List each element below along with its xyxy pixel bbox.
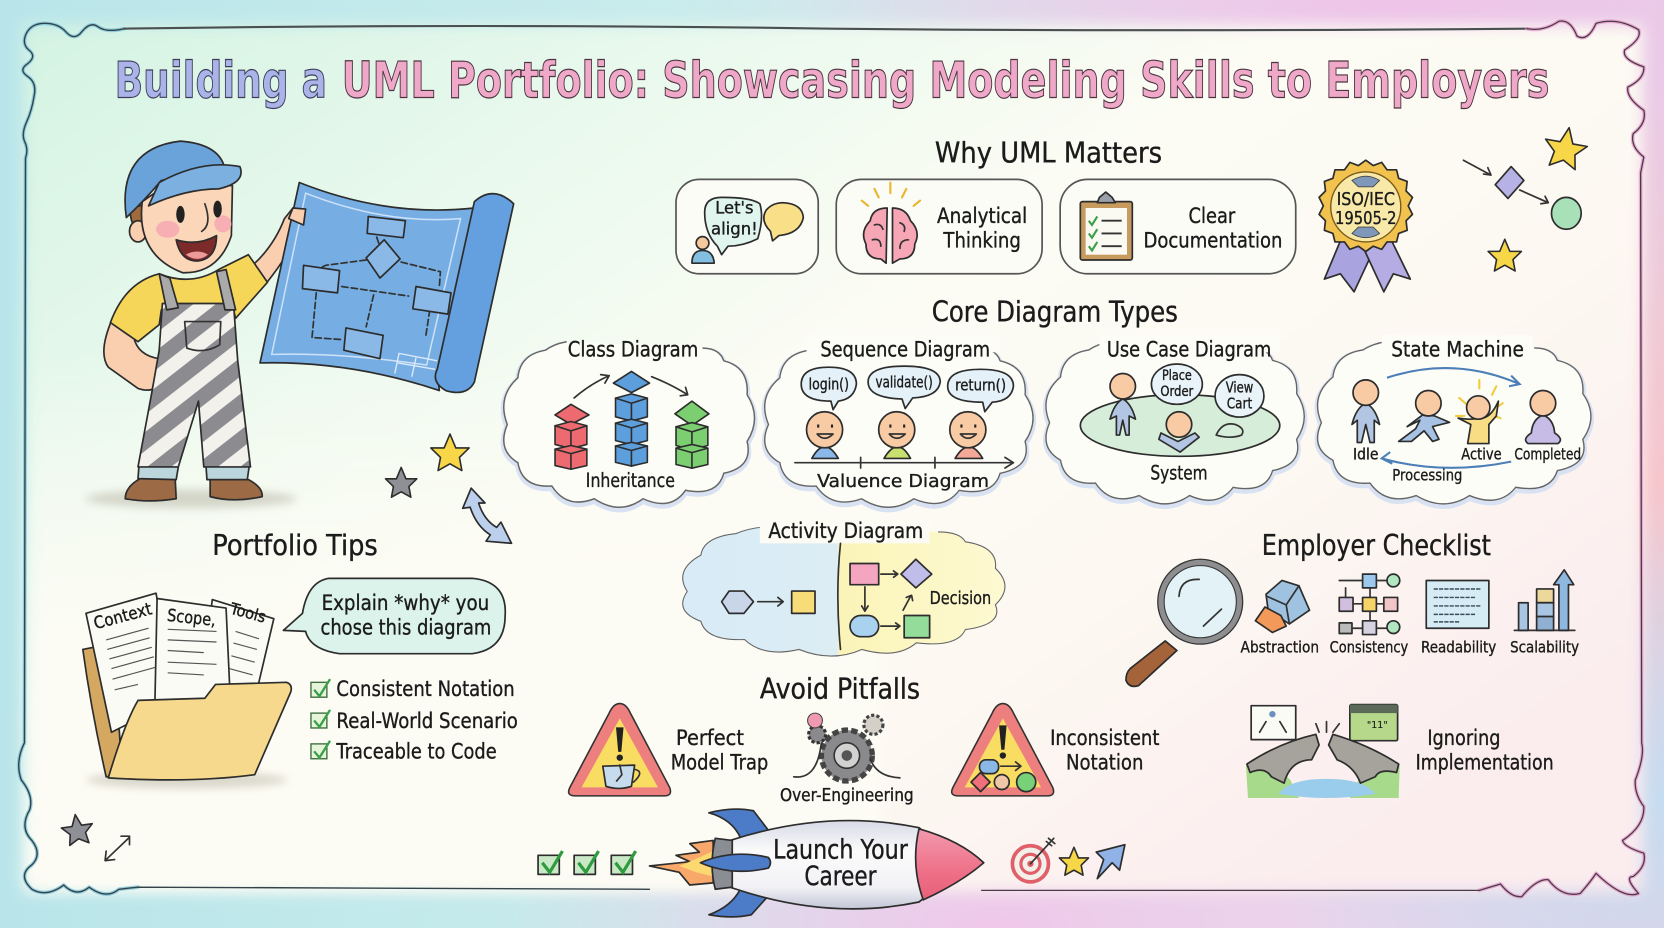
icon: red stack	[555, 404, 589, 469]
card: clear documentation: Documentation	[1143, 228, 1282, 253]
card: clear documentation: Clear	[1189, 204, 1235, 229]
checklist: portfolio tips	[311, 677, 518, 765]
checklist: portfolio tips: Consistent Notation	[336, 677, 515, 702]
panel: activity diagram	[683, 519, 1005, 656]
decoration: bottom left star and arrow	[60, 812, 130, 861]
lifeline people	[807, 412, 986, 458]
icon: green stack	[675, 401, 709, 468]
icon: magnifying glass	[1126, 559, 1243, 686]
decoration: stars and uml shapes top right	[1463, 124, 1590, 271]
actor	[1110, 374, 1135, 435]
panel: sequence diagram	[765, 335, 1033, 509]
rocket: launch your career: Career	[804, 861, 877, 892]
card: lets align	[676, 179, 818, 274]
fins	[709, 809, 770, 838]
pitfall: ignoring implementation broken bridge: Implementation	[1416, 750, 1554, 775]
panel: state machine: Active	[1461, 444, 1502, 463]
item: readability	[1421, 580, 1496, 657]
nose	[916, 829, 984, 900]
pitfall: ignoring implementation broken bridge: Ignoring	[1427, 726, 1501, 751]
use case bubbles: Place	[1162, 368, 1192, 384]
card: analytical thinking: Thinking	[943, 228, 1021, 253]
striped overalls	[138, 303, 250, 467]
badge: ISO/IEC 19505-2: 19505-2	[1335, 208, 1397, 229]
use case bubbles: View	[1226, 379, 1253, 397]
icon: blue stack	[613, 371, 649, 466]
completed figure	[1526, 391, 1560, 444]
pitfall: inconsistent notation: Inconsistent	[1050, 726, 1159, 751]
pitfall: perfect model trap: Perfect	[676, 726, 744, 751]
body	[730, 821, 934, 909]
boots	[125, 465, 262, 501]
decoration: stars and double arrow centre left	[386, 434, 512, 543]
heading: why uml matters: Why UML Matters	[935, 135, 1162, 169]
badge: ISO/IEC 19505-2	[1319, 160, 1412, 292]
left arm	[104, 318, 160, 390]
item: abstraction: Abstraction	[1241, 638, 1319, 657]
speech bubbles: login()	[809, 374, 849, 393]
raised arm	[253, 208, 306, 284]
panel: class diagram: Inheritance	[586, 469, 675, 492]
icon: folder with documents: Scope,	[166, 606, 217, 631]
speech bubbles: validate()	[876, 372, 933, 391]
icon: brain	[862, 183, 920, 263]
item: readability: Readability	[1421, 638, 1496, 657]
panel: sequence diagram: Sequence Diagram	[820, 338, 990, 363]
item: consistency: Consistency	[1330, 638, 1408, 657]
panel: class diagram	[504, 338, 755, 509]
item: consistency	[1330, 574, 1408, 657]
blueprint roll	[435, 194, 514, 392]
checklist: portfolio tips: Real-World Scenario	[336, 709, 518, 734]
hair and ear	[130, 202, 159, 240]
active figure	[1456, 380, 1503, 444]
badge: ISO/IEC 19505-2: ISO/IEC	[1337, 189, 1395, 210]
speech bubbles: return()	[955, 376, 1006, 395]
panel: activity diagram: Activity Diagram	[768, 519, 923, 544]
use case bubbles: Order	[1160, 384, 1194, 400]
pitfall: perfect model trap: Model Trap	[671, 750, 768, 775]
panel: state machine	[1318, 335, 1591, 506]
centre figure and cart	[1159, 412, 1243, 452]
hat	[125, 141, 225, 218]
icon: folder with documents	[83, 593, 291, 788]
panel: class diagram: Class Diagram	[568, 338, 698, 363]
card: analytical thinking: Analytical	[937, 204, 1027, 229]
icon: folder with documents: Context	[92, 599, 155, 634]
panel: state machine: Idle	[1353, 444, 1379, 463]
card: lets align: align!	[711, 220, 758, 240]
running figure	[1399, 391, 1450, 441]
pitfall: ignoring implementation broken bridge: "11"	[1367, 720, 1388, 731]
decoration: target star arrow	[1012, 838, 1125, 882]
callout: explain why: Explain *why* you	[322, 591, 489, 616]
panel: use case diagram: Use Case Diagram	[1107, 338, 1271, 363]
shirt	[110, 255, 267, 342]
pitfall: ignoring implementation broken bridge	[1246, 705, 1554, 798]
card: analytical thinking	[836, 179, 1042, 274]
use case bubbles: Cart	[1227, 395, 1252, 413]
callout: explain why: chose this diagram	[321, 616, 491, 641]
item: scalability	[1510, 570, 1579, 657]
pitfall: perfect model trap	[569, 704, 768, 796]
heading: avoid pitfalls: Avoid Pitfalls	[760, 671, 920, 705]
use case bubbles	[1151, 364, 1264, 417]
item: scalability: Scalability	[1510, 638, 1579, 657]
pitfall: inconsistent notation	[952, 704, 1159, 796]
hand	[289, 208, 306, 225]
middle fin	[700, 854, 770, 871]
panel: state machine: State Machine	[1391, 338, 1524, 363]
rocket: launch your career: Launch Your	[773, 834, 908, 865]
item: abstraction	[1241, 580, 1319, 657]
speech bubbles	[801, 366, 1013, 412]
tail ring	[712, 838, 732, 889]
flame	[649, 840, 713, 885]
flow left	[722, 591, 815, 613]
card: clear documentation	[1060, 179, 1296, 274]
heading: employer checklist: Employer Checklist	[1262, 528, 1491, 562]
checkmarks before rocket	[538, 851, 636, 874]
title: Building a	[115, 52, 327, 110]
heading: portfolio tips: Portfolio Tips	[212, 528, 378, 562]
panel: use case diagram	[1046, 335, 1304, 506]
panel: sequence diagram: Valuence Diagram	[817, 471, 989, 492]
icon: clipboard	[1080, 192, 1132, 260]
heading: core diagram types: Core Diagram Types	[932, 295, 1178, 329]
pitfall: over-engineering gears: Over-Engineering	[780, 785, 914, 806]
panel: state machine: Processing	[1392, 466, 1462, 485]
pitfall: inconsistent notation: Notation	[1066, 750, 1143, 775]
checklist: portfolio tips: Traceable to Code	[336, 740, 497, 765]
face	[141, 183, 232, 273]
pitfall: over-engineering gears	[780, 713, 914, 806]
ground shadow	[85, 489, 297, 508]
panel: use case diagram: System	[1150, 462, 1208, 485]
icon: folder with documents: Tools	[227, 599, 268, 627]
rocket: launch your career	[649, 809, 984, 917]
idle figure	[1352, 380, 1380, 443]
blueprint sheet	[260, 183, 474, 391]
card: lets align: Let's	[715, 198, 754, 218]
character: engineer holding blueprint	[85, 141, 514, 508]
flow right	[850, 559, 932, 638]
panel: state machine: Completed	[1514, 444, 1581, 463]
panel: activity diagram: Decision	[930, 588, 991, 609]
callout: explain why	[283, 578, 505, 654]
